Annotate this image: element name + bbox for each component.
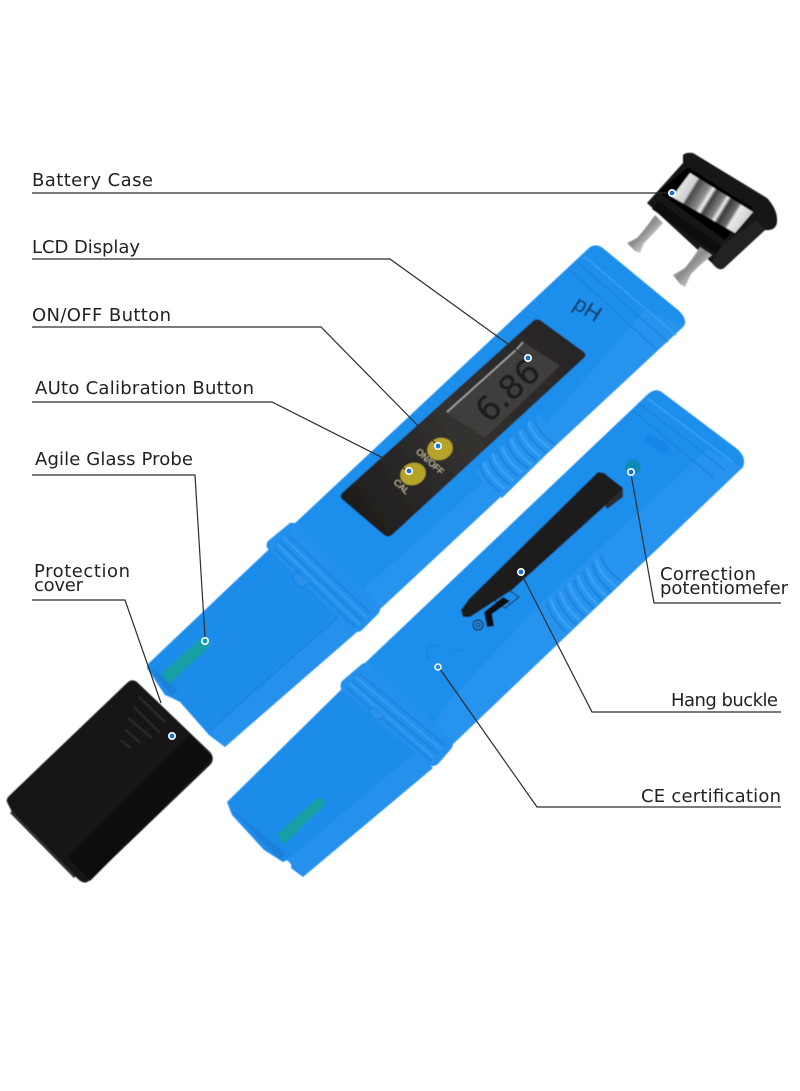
hang buckle clip <box>461 472 623 617</box>
callout: CE certification: CE certification <box>641 786 781 807</box>
end ridges of back pen <box>633 398 733 478</box>
callout: Protection cover: Protection <box>34 561 130 582</box>
probe housing side band <box>210 613 357 747</box>
back grip ribs <box>543 553 622 637</box>
lighter side band of front pen <box>360 310 684 611</box>
LCD reading: 6.86 <box>467 351 548 430</box>
collar of back pen <box>340 663 453 766</box>
back housing open end <box>229 806 285 860</box>
callout: LCD Display: LCD Display <box>32 237 140 258</box>
callout: Correction potentiometer: potentiomefer <box>660 578 789 599</box>
probe housing open end <box>149 668 178 696</box>
cover open lip <box>10 811 76 878</box>
ON/OFF button <box>424 434 456 464</box>
pen: back view of pH meter <box>227 390 744 877</box>
lighter side band of back pen <box>435 450 743 745</box>
top edge ribs of front pen <box>413 376 461 421</box>
callout: Correction potentiometer: Correction <box>660 564 756 585</box>
callout: ON/OFF Button <box>32 305 441 449</box>
CE mark <box>427 645 462 660</box>
pH mark: pH <box>569 291 606 327</box>
callout: Battery Case: Battery Case <box>32 170 153 191</box>
display panel <box>341 319 586 536</box>
callout: Auto Calibration Button <box>32 378 412 474</box>
callout: Hang buckle: Hang buckle <box>671 690 778 711</box>
teal probe window of back pen <box>277 798 325 845</box>
callout: LCD Display <box>32 237 531 361</box>
cover body <box>7 680 213 882</box>
callout: Agile Glass Probe: Agile Glass Probe <box>35 449 193 470</box>
callout: CE certification <box>435 664 781 807</box>
callout: Battery Case <box>32 170 675 196</box>
LCD screen <box>447 342 560 438</box>
body of back pen <box>365 390 744 745</box>
lower probe housing of front pen <box>147 534 375 747</box>
collar of front pen <box>266 523 380 632</box>
case interior <box>658 167 753 240</box>
cover side band <box>68 735 212 881</box>
logo beneath clip <box>473 589 519 630</box>
potentiometer hole <box>626 460 640 474</box>
coin batteries <box>672 173 753 233</box>
oval recess <box>642 432 672 456</box>
callout: ON/OFF Button: ON/OFF Button <box>32 305 171 326</box>
CAL button <box>397 459 429 489</box>
callout: Hang buckle <box>518 569 781 712</box>
callout: Auto Calibration Button: AUto Calibration Button <box>35 378 254 399</box>
callout: Protection cover: cover <box>34 575 84 596</box>
clip slot bar <box>652 201 722 254</box>
lower housing of back pen <box>227 676 445 877</box>
teal probe window <box>161 637 210 684</box>
case front face <box>712 220 765 269</box>
callout: Protection cover <box>32 561 175 739</box>
grip ribs of front pen <box>474 413 560 498</box>
pen: front view of pH meter <box>147 245 685 747</box>
end ridges of front pen <box>570 256 676 349</box>
body of front pen <box>293 245 685 611</box>
callout: Correction potentiometer <box>628 469 789 603</box>
protection cover <box>7 680 213 882</box>
probe housing fold line <box>217 613 343 723</box>
battery case <box>627 153 777 287</box>
metal clip left <box>627 215 663 253</box>
CAL label: CAL <box>392 477 411 496</box>
callout: Agile Glass Probe <box>32 449 208 644</box>
cover grip ridges <box>121 697 166 748</box>
case silhouette and flange <box>647 153 777 269</box>
ON/OFF label: ON/OFF <box>414 447 446 477</box>
metal clip right <box>673 247 712 287</box>
back housing side band <box>287 752 433 877</box>
